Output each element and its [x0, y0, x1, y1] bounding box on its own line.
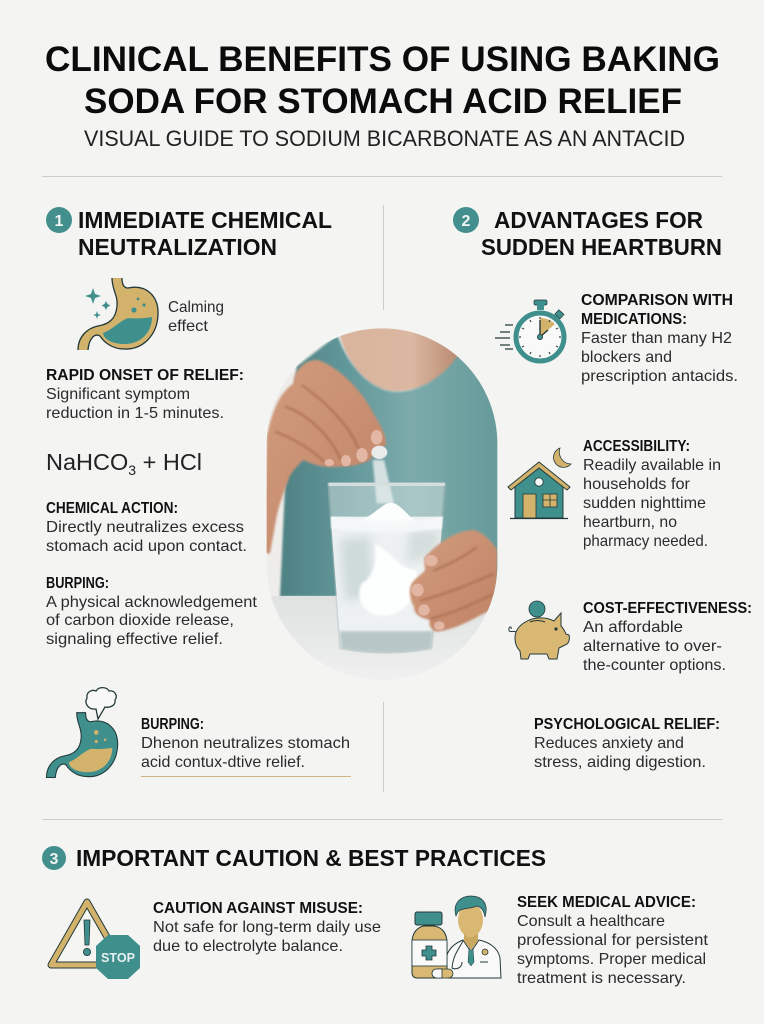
section 2 number badge: [453, 207, 479, 233]
section 3 heading: IMPORTANT CAUTION & BEST PRACTICES: [76, 845, 546, 871]
text block: burping neutralizes: [141, 716, 350, 771]
text block: cost-effectiveness: alternative to over-: [583, 638, 722, 655]
panel: important caution and best practices: [42, 845, 709, 987]
icon: house with moon: [508, 448, 571, 518]
text block: accessibility: ACCESSIBILITY:: [583, 438, 690, 455]
text block: seek medical advice: SEEK MEDICAL ADVICE:: [517, 894, 696, 911]
section 2 heading: [481, 207, 722, 260]
text block: comparison with medications: Faster than many H2: [581, 330, 732, 347]
text block: comparison with medications: [581, 292, 738, 385]
text block: rapid onset of relief: [46, 367, 244, 422]
text block: chemical action: [46, 500, 247, 555]
icon: medicine bottle: [412, 912, 453, 978]
caption: calming effect: [168, 299, 224, 335]
text block: accessibility: [583, 438, 721, 550]
text block: psychological relief: [534, 716, 720, 771]
section 1 heading: [78, 207, 332, 260]
title: [45, 40, 720, 121]
central photo: powder poured in water glass: [266, 328, 498, 662]
icon: piggy bank: [509, 601, 569, 659]
text block: seek medical advice: treatment is necessary.: [517, 970, 686, 987]
icon: warning triangle with stop sign: STOP: [101, 950, 135, 965]
text block: accessibility: pharmacy needed.: [583, 533, 708, 550]
text block: chemical action: stomach acid upon contact.: [46, 538, 247, 555]
text block: cost-effectiveness: [583, 600, 752, 674]
text block: burping acknowledgement: [46, 575, 258, 648]
section 3 number badge: [42, 846, 66, 870]
chemical formula: NaHCO: [46, 449, 128, 475]
text block: burping acknowledgement: of carbon dioxide release,: [46, 612, 234, 629]
text block: chemical action: Directly neutralizes excess: [46, 519, 244, 536]
text block: burping acknowledgement: BURPING:: [46, 575, 109, 592]
subtitle: VISUAL GUIDE TO SODIUM BICARBONATE AS AN ANTACID: [84, 126, 685, 151]
text block: burping acknowledgement: signaling effective relief.: [46, 631, 223, 648]
title: CLINICAL BENEFITS OF USING BAKING: [45, 40, 720, 79]
caption: calming effect: effect: [168, 318, 209, 335]
section 2 number badge: 2: [462, 213, 471, 230]
section 3 number badge: 3: [50, 851, 59, 868]
title: SODA FOR STOMACH ACID RELIEF: [84, 82, 682, 121]
text block: comparison with medications: prescription antacids.: [581, 368, 738, 385]
section 1 number badge: 1: [55, 213, 64, 230]
text block: comparison with medications: COMPARISON WITH: [581, 292, 733, 309]
text block: chemical action: CHEMICAL ACTION:: [46, 500, 178, 517]
text block: caution against misuse: CAUTION AGAINST MISUSE:: [153, 900, 363, 917]
text block: psychological relief: stress, aiding digestion.: [534, 754, 706, 771]
text block: caution against misuse: due to electrolyte balance.: [153, 938, 343, 955]
icon: warning triangle with stop sign: [51, 902, 140, 979]
text block: seek medical advice: [517, 894, 709, 987]
section 2 heading: SUDDEN HEARTBURN: [481, 234, 722, 260]
chemical formula: 3: [128, 462, 136, 478]
text block: burping neutralizes: acid contux-dtive relief.: [141, 754, 305, 771]
caption: calming effect: Calming: [168, 299, 224, 316]
text block: burping acknowledgement: A physical acknowledgement: [46, 594, 258, 611]
section 1 number badge: [46, 207, 72, 233]
text block: seek medical advice: symptoms. Proper medical: [517, 951, 706, 968]
section 2 heading: ADVANTAGES FOR: [494, 207, 703, 233]
text block: accessibility: heartburn, no: [583, 514, 677, 531]
text block: cost-effectiveness: An affordable: [583, 619, 683, 636]
text block: accessibility: households for: [583, 476, 691, 493]
panel: advantages for sudden heartburn: [453, 207, 752, 771]
text block: burping neutralizes: BURPING:: [141, 716, 204, 733]
text block: accessibility: sudden nighttime: [583, 495, 706, 512]
text block: comparison with medications: blockers and: [581, 349, 672, 366]
text block: caution against misuse: Not safe for long-term daily use: [153, 919, 381, 936]
text block: seek medical advice: Consult a healthcare: [517, 913, 665, 930]
text block: burping neutralizes: Dhenon neutralizes stomach: [141, 735, 350, 752]
text block: rapid onset of relief: Significant symptom: [46, 386, 190, 403]
chemical formula: + HCl: [136, 449, 202, 475]
text block: rapid onset of relief: RAPID ONSET OF RELIEF:: [46, 367, 244, 384]
text block: cost-effectiveness: COST-EFFECTIVENESS:: [583, 600, 752, 617]
text block: comparison with medications: MEDICATIONS:: [581, 311, 687, 328]
icon: stopwatch: [495, 300, 564, 361]
panel: immediate chemical neutralization: [46, 207, 351, 778]
text block: psychological relief: PSYCHOLOGICAL RELIEF:: [534, 716, 720, 733]
text block: psychological relief: Reduces anxiety and: [534, 735, 684, 752]
section 1 heading: IMMEDIATE CHEMICAL: [78, 207, 332, 233]
section 1 heading: NEUTRALIZATION: [78, 234, 277, 260]
icon: doctor: [447, 896, 501, 978]
text block: rapid onset of relief: reduction in 1-5 minutes.: [46, 405, 224, 422]
text block: seek medical advice: professional for persistent: [517, 932, 709, 949]
text block: accessibility: Readily available in: [583, 457, 721, 474]
icon: calming stomach: [78, 278, 158, 350]
text block: caution against misuse: [153, 900, 381, 955]
icon: stomach with burp cloud: [46, 688, 118, 778]
text block: cost-effectiveness: the-counter options.: [583, 657, 726, 674]
